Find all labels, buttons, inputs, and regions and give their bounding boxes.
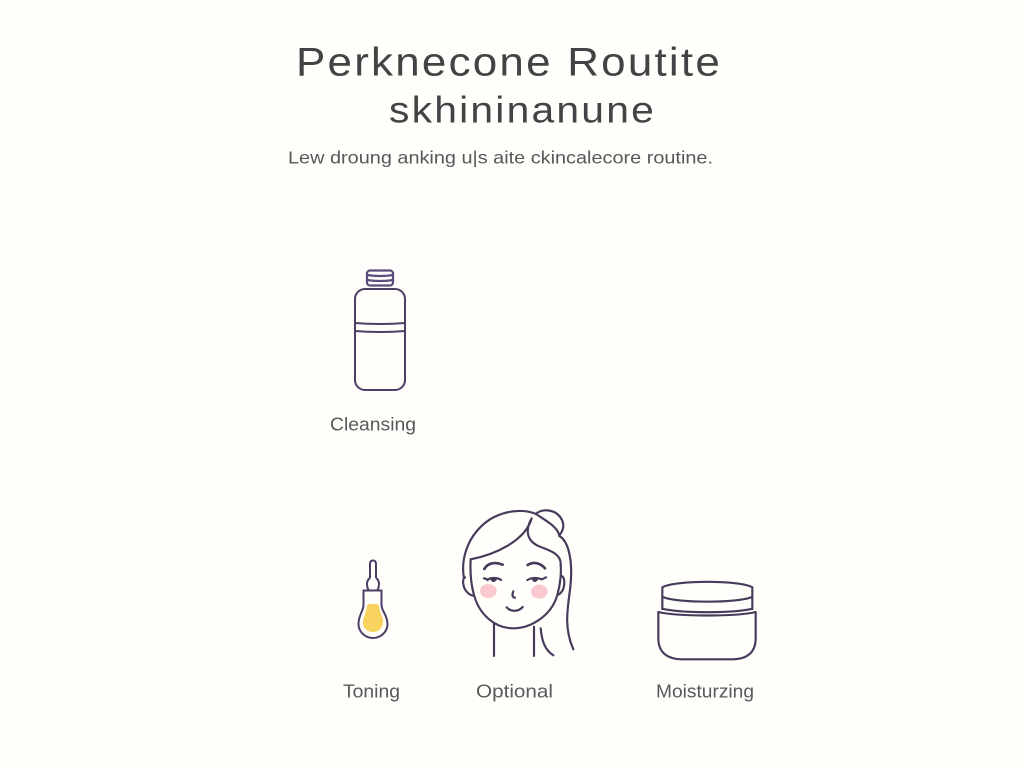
cheek blush left [480, 584, 497, 598]
label: moisturizing: Moisturzing [656, 680, 754, 702]
hair [463, 511, 561, 578]
face outline [470, 559, 561, 628]
icon: toning dropper [358, 560, 388, 638]
ears [463, 576, 564, 596]
label: optional: Optional [476, 680, 553, 702]
label: toning: Toning [343, 680, 400, 702]
eyes [484, 577, 546, 580]
nose [512, 591, 515, 598]
title [296, 40, 722, 130]
icon: moisturizing jar [658, 582, 756, 659]
ponytail [541, 536, 573, 655]
label: cleansing: Cleansing [330, 414, 416, 434]
icon: face with ponytail [463, 510, 573, 656]
icon: cleansing bottle [355, 270, 405, 390]
title: skhininanune [389, 90, 656, 130]
subtitle: Lew droung anking u|s aite ckincalecore routine. [288, 148, 713, 168]
hair bun [536, 510, 563, 535]
cheek blush right [531, 585, 548, 599]
mouth [507, 607, 523, 611]
neck [494, 624, 534, 656]
title: Perknecone Routite [296, 40, 722, 84]
eyebrows [484, 563, 545, 569]
